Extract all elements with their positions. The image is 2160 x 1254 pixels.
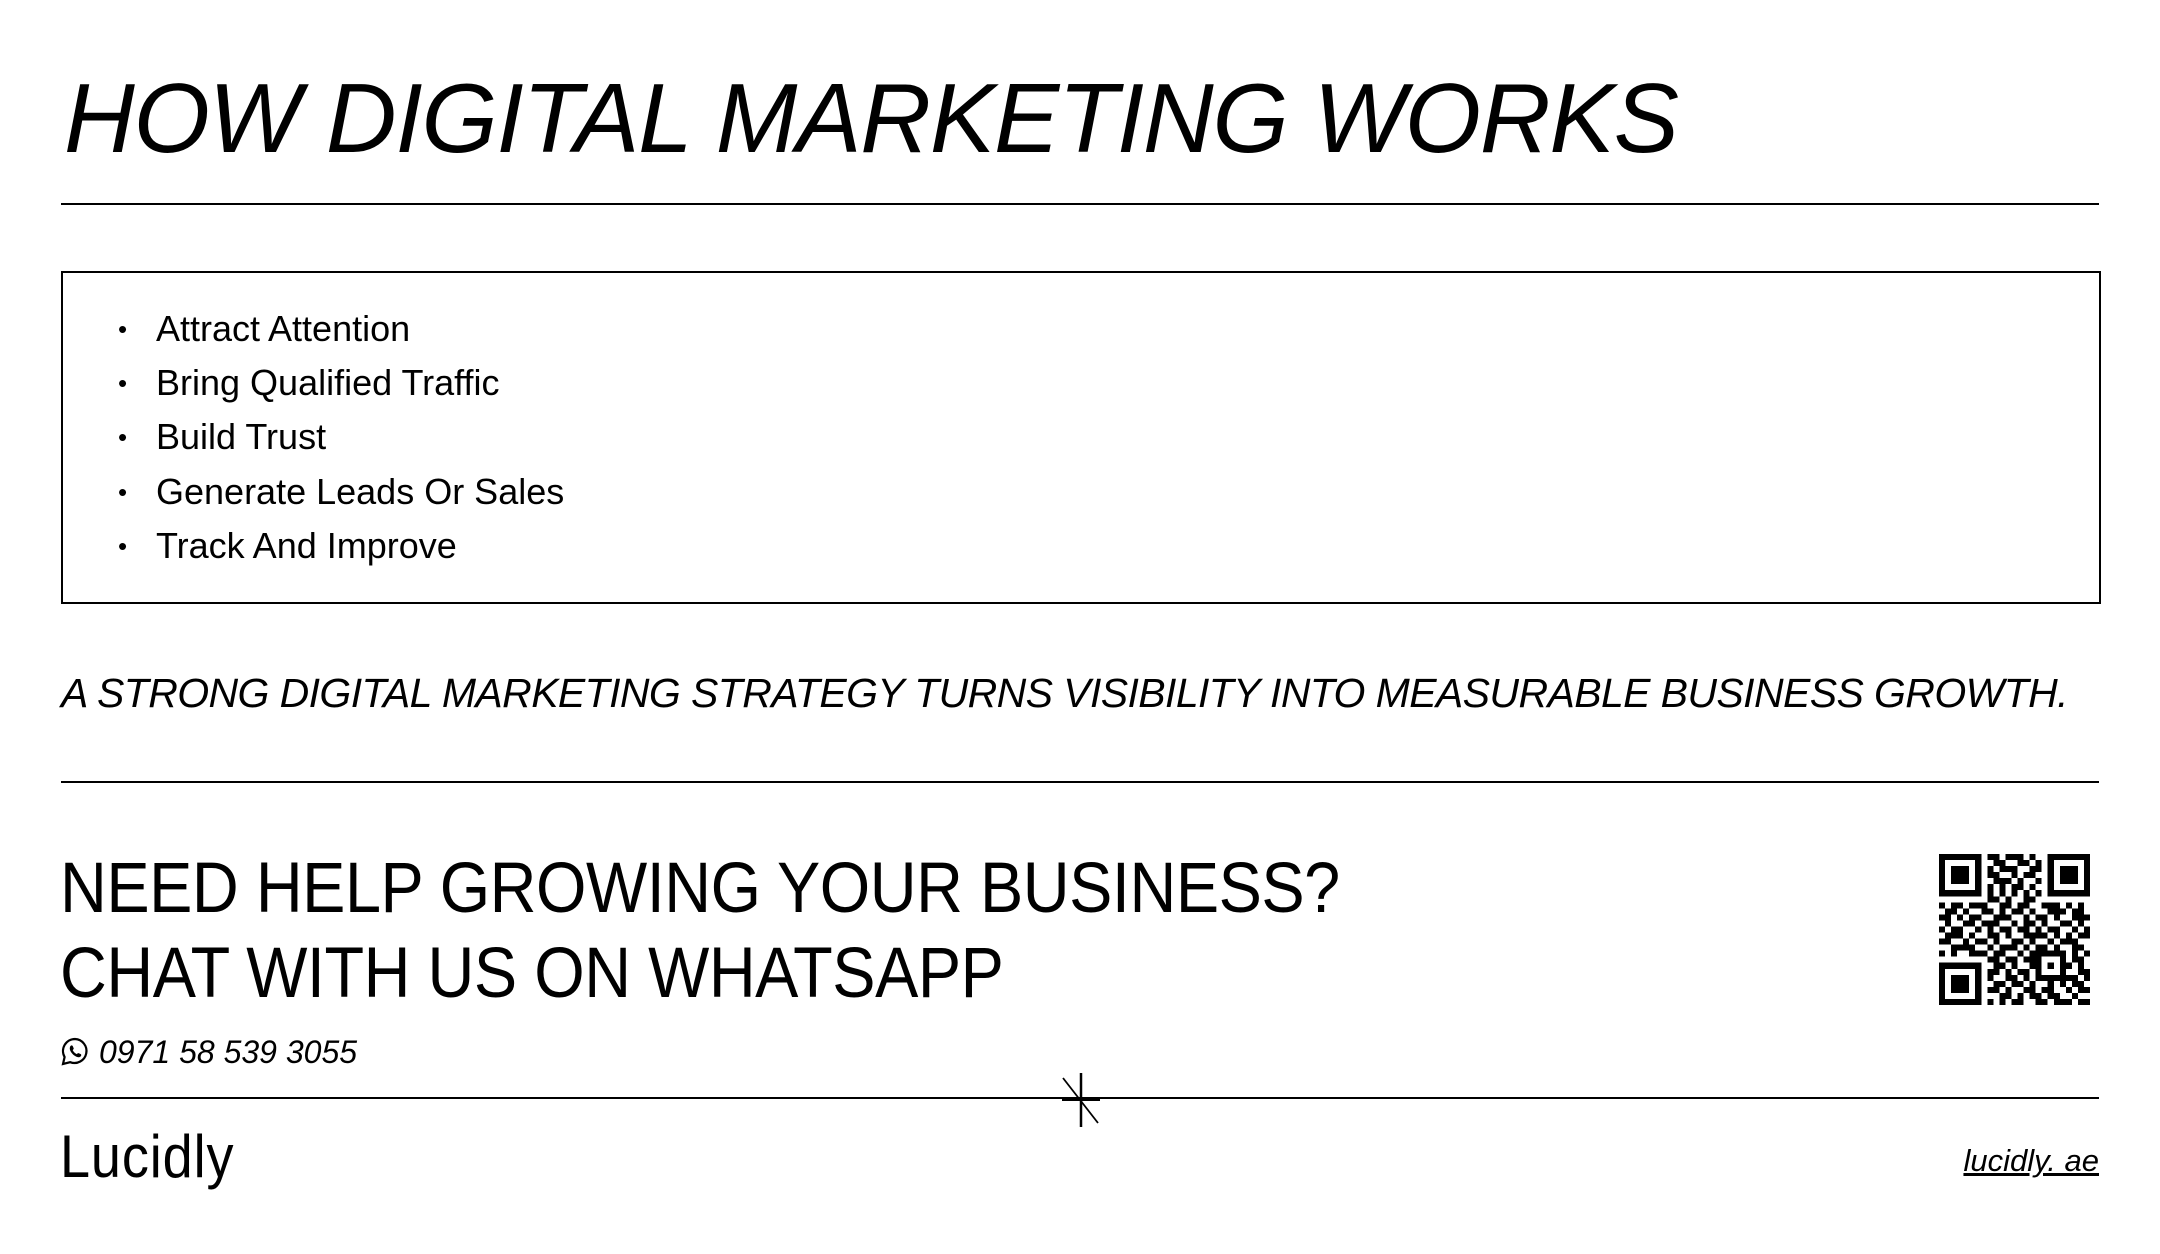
list item: leads or sales: Generate Leads Or Sales xyxy=(156,471,564,512)
call to action heading: CHAT WITH US ON WHATSAPP xyxy=(60,934,1003,1013)
logo: Lucidly xyxy=(60,1123,234,1190)
panel: steps list: • xyxy=(118,477,127,507)
panel: steps list: • xyxy=(118,368,127,398)
list item: qualified traffic: Bring Qualified Traffic xyxy=(156,362,500,403)
icon: star mark xyxy=(1062,1073,1100,1127)
website link: lucidly. ae xyxy=(1963,1143,2099,1178)
list item: build trust: Build Trust xyxy=(156,416,326,457)
title: HOW DIGITAL MARKETING WORKS xyxy=(64,63,1678,173)
phone contact xyxy=(62,1034,358,1070)
list item: track and improve: Track And Improve xyxy=(156,525,457,566)
icon: whatsapp xyxy=(62,1038,88,1066)
call to action heading xyxy=(60,849,1340,1013)
panel: steps list: • xyxy=(118,531,127,561)
panel: steps list: • xyxy=(118,422,127,452)
tagline: A STRONG DIGITAL MARKETING STRATEGY TURNS VISIBILITY INTO MEASURABLE BUSINESS GROWTH. xyxy=(61,670,2068,716)
list item: attract attention: Attract Attention xyxy=(156,308,410,349)
text: 0971 58 539 3055 xyxy=(99,1034,357,1070)
call to action heading: NEED HELP GROWING YOUR BUSINESS? xyxy=(60,849,1340,928)
QR code xyxy=(1939,854,2090,1005)
panel: steps list: • xyxy=(118,314,127,344)
panel: steps list xyxy=(61,271,2101,604)
